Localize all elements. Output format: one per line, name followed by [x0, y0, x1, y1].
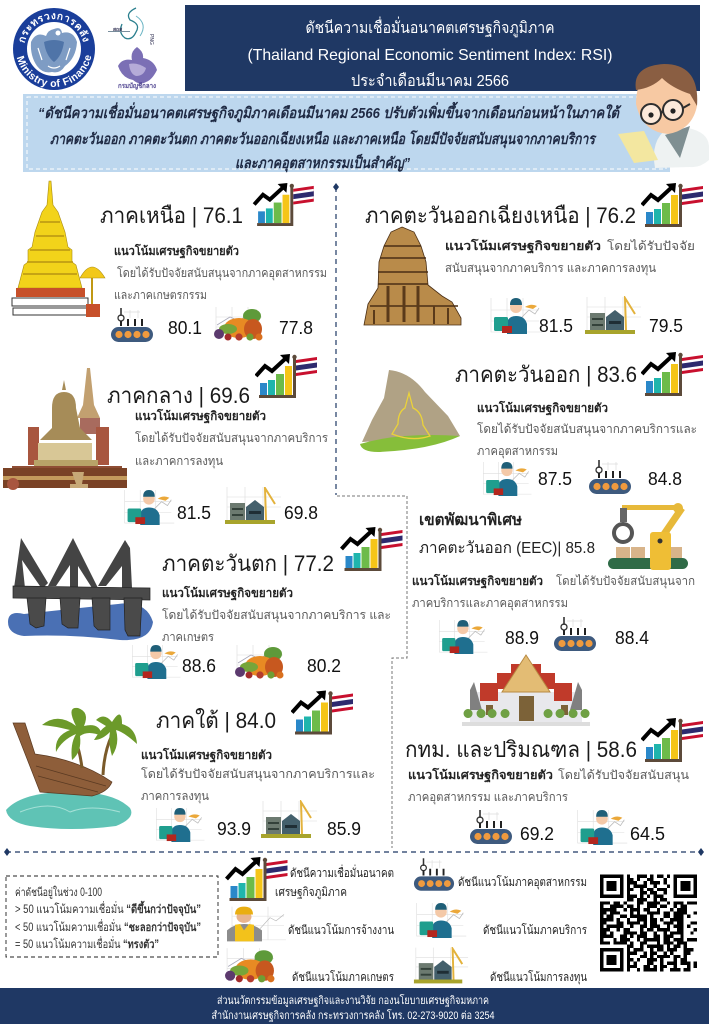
icon: investment: [261, 801, 317, 838]
number: agriculture 80.2: 80.2: [307, 656, 341, 676]
panel: Northeast: [364, 183, 703, 336]
heading: North: ภาคเหนือ | 76.1: [100, 203, 243, 228]
icon: sentiment chart: [342, 527, 402, 571]
icon: long-tail boat and palm trees: [6, 708, 137, 829]
text block: Bangkok: [408, 767, 689, 805]
icon: river bridge: [8, 538, 153, 640]
icon: marble temple: [462, 655, 590, 726]
icon: golden chedi: [12, 181, 105, 317]
icon: services: [491, 298, 542, 334]
icon: investment: [225, 487, 281, 524]
header banner: [185, 5, 700, 91]
legend text: services: ดัชนีแนวโน้มภาคบริการ: [483, 923, 587, 937]
text block: East: โดยได้รับปัจจัยสนับสนุนจากภาคบริการและ: [477, 422, 697, 437]
text block: EEC: ภาคบริการและภาคอุตสาหกรรม: [412, 596, 568, 611]
legend icon: agriculture: [225, 948, 274, 982]
header banner: ประจำเดือนมีนาคม 2566: [351, 72, 509, 90]
panel: EEC: [412, 503, 695, 654]
number: services 88.9: 88.9: [505, 628, 539, 648]
heading: Northeast: ภาคตะวันออกเฉียงเหนือ | 76.2: [365, 203, 636, 228]
heading: EEC: ภาคตะวันออก (EEC)| 85.8: [419, 540, 595, 557]
text block: Bangkok: โดยได้รับปัจจัยสนับสนุน: [558, 768, 689, 783]
logo: office emblem: PNG: [148, 34, 154, 45]
heading: South: ภาคใต้ | 84.0: [156, 708, 276, 733]
legend text: investment: ดัชนีแนวโน้มการลงทุน: [490, 970, 587, 985]
heading: Bangkok: กทม. และปริมณฑล | 58.6: [405, 737, 637, 762]
text block: Northeast: โดยได้รับปัจจัย: [607, 239, 695, 253]
footer band: [0, 988, 709, 1024]
number: industry 69.2: 69.2: [520, 824, 554, 844]
header banner: ดัชนีความเชื่อมั่นอนาคตเศรษฐกิจภูมิภาค: [306, 16, 554, 38]
icon: rock with golden Buddha: [360, 370, 460, 452]
icon: industry: [111, 308, 153, 342]
icon: agriculture: [214, 307, 262, 341]
panel: West: [8, 527, 402, 679]
number: industry 84.8: 84.8: [648, 469, 682, 489]
icon: industry: [554, 617, 596, 651]
text block: North: [114, 243, 327, 302]
text block: South: แนวโน้มเศรษฐกิจขยายตัว: [141, 747, 272, 763]
panel: North: [12, 181, 327, 342]
divider lines: [4, 183, 704, 856]
number: services 81.5: 81.5: [539, 316, 573, 336]
icon: agriculture: [235, 645, 284, 679]
number: services 88.6: 88.6: [182, 656, 216, 676]
illustration: doctor with glasses: [618, 64, 709, 168]
icon: sentiment chart: [642, 718, 703, 762]
legend icon: investment: [414, 948, 468, 983]
icon: sentiment chart: [292, 690, 353, 734]
footer band: ส่วนนวัตกรรมข้อมูลเศรษฐกิจและงานวิจัย กองนโยบายเศรษฐกิจมหภาค: [217, 993, 489, 1007]
panel: Central: [3, 354, 329, 525]
panel: Bangkok and vicinity: [405, 655, 703, 845]
icon: services: [125, 490, 174, 525]
text block: West: แนวโน้มเศรษฐกิจขยายตัว: [162, 585, 293, 601]
icon: services: [578, 810, 627, 845]
legend box: index range: < 50 แนวโน้มความเชื่อมั่น “ชะลอกว่าปัจจุบัน”: [15, 919, 201, 935]
number: services 81.5: 81.5: [177, 503, 211, 523]
text block: EEC: [412, 573, 695, 611]
icon: seated Buddha: [3, 368, 127, 490]
text block: East: แนวโน้มเศรษฐกิจขยายตัว: [477, 400, 608, 416]
text block: EEC: โดยได้รับปัจจัยสนับสนุนจาก: [556, 574, 695, 589]
text block: Bangkok: แนวโน้มเศรษฐกิจขยายตัว: [408, 767, 553, 783]
text block: North: แนวโน้มเศรษฐกิจขยายตัว: [114, 243, 239, 259]
legend box: index range: > 50 แนวโน้มความเชื่อมั่น “ดีขึ้นกว่าปัจจุบัน”: [15, 900, 201, 917]
legend: icon key: [225, 857, 587, 985]
number: investment 79.5: 79.5: [649, 316, 683, 336]
text block: North: โดยได้รับปัจจัยสนับสนุนจากภาคอุตสาหกรรม: [117, 266, 327, 281]
icon: sentiment chart: [254, 183, 314, 226]
logo: office emblem: [108, 8, 154, 45]
number: investment 85.9: 85.9: [327, 819, 361, 839]
legend box: index range: [6, 876, 218, 957]
text block: Central: [135, 408, 329, 469]
text block: Central: โดยได้รับปัจจัยสนับสนุนจากภาคบริการ: [135, 431, 329, 446]
number: agriculture 77.8: 77.8: [279, 318, 313, 338]
icon: sentiment chart: [642, 183, 703, 227]
number: industry 88.4: 88.4: [615, 628, 649, 648]
text block: West: โดยได้รับปัจจัยสนับสนุนจากภาคบริการ และ: [162, 608, 391, 623]
heading: Central: ภาคกลาง | 69.6: [107, 383, 250, 408]
icon: sentiment chart: [256, 354, 317, 398]
number: investment 69.8: 69.8: [284, 503, 318, 523]
text block: Bangkok: ภาคอุตสาหกรรม และภาคบริการ: [408, 790, 569, 805]
legend text: agriculture: ดัชนีแนวโน้มภาคเกษตร: [292, 970, 394, 984]
legend icon: employment: [227, 907, 286, 941]
logo: Ministry of Finance: กระทรวงการคลัง: [20, 13, 89, 43]
icon: industry: [470, 810, 512, 844]
icon: robot arm: [608, 503, 688, 570]
callout: summary quote: “ดัชนีความเชื่อมั่นอนาคตเศรษฐกิจภูมิภาคเดือนมีนาคม 2566 ปรับตัวเพิ่มขึ้นจากเดือนก่อนหน้าในภาคใต้: [38, 101, 622, 123]
number: services 64.5: 64.5: [630, 824, 665, 844]
legend text: employment: ดัชนีแนวโน้มการจ้างงาน: [288, 923, 394, 937]
number: industry 80.1: 80.1: [168, 318, 202, 338]
text block: West: [162, 585, 391, 644]
text block: Central: แนวโน้มเศรษฐกิจขยายตัว: [135, 408, 266, 424]
legend icon: services: [417, 903, 466, 938]
panel: South: [6, 690, 375, 842]
icon: services: [483, 462, 531, 496]
legend text: industry: ดัชนีแนวโน้มภาคอุตสาหกรรม: [458, 875, 587, 890]
logo: Ministry of Finance: Ministry of Finance: [16, 55, 91, 88]
callout: summary quote: [23, 94, 670, 173]
text block: West: ภาคเกษตร: [162, 630, 215, 644]
logo: office emblem: สถส: [113, 27, 123, 33]
logo: garuda emblem: กรมบัญชีกลาง: [118, 82, 156, 90]
callout: summary quote: ภาคตะวันออก ภาคตะวันตก ภาคตะวันออกเฉียงเหนือ และภาคเหนือ โดยมีปัจจัยสนับสนุนจากภาคบริการ: [50, 129, 597, 149]
text block: Northeast: แนวโน้มเศรษฐกิจขยายตัว: [445, 238, 601, 254]
legend text: sentiment index: ดัชนีความเชื่อมั่นอนาคต: [290, 864, 394, 880]
text block: EEC: แนวโน้มเศรษฐกิจขยายตัว: [412, 573, 543, 589]
icon: services: [439, 620, 487, 654]
footer band: สำนักงานเศรษฐกิจการคลัง กระทรวงการคลัง โทร. 02-273-9020 ต่อ 3254: [212, 1008, 494, 1022]
heading: EEC: [419, 511, 595, 557]
number: services 93.9: 93.9: [217, 819, 251, 839]
header banner: (Thailand Regional Economic Sentiment Index: RSI): [248, 47, 612, 64]
logo: Ministry of Finance: [13, 8, 95, 90]
text block: Central: และภาคการลงทุน: [135, 454, 223, 469]
icon: investment: [585, 297, 641, 334]
callout: summary quote: และภาคอุตสาหกรรมเป็นสำคัญ”: [235, 153, 410, 173]
icon: services: [156, 808, 204, 842]
text block: South: โดยได้รับปัจจัยสนับสนุนจากภาคบริการและ: [141, 767, 375, 782]
text block: North: และภาคเกษตรกรรม: [114, 288, 207, 302]
icon: stone prasat: [364, 227, 461, 325]
legend box: index range: ค่าดัชนีอยู่ในช่วง 0-100: [15, 886, 102, 899]
text block: South: ภาคการลงทุน: [141, 789, 209, 804]
heading: West: ภาคตะวันตก | 77.2: [162, 551, 334, 576]
icon: industry: [589, 460, 631, 494]
text block: East: [477, 400, 697, 459]
text block: South: [141, 747, 375, 804]
legend icon: industry: [414, 858, 454, 891]
heading: EEC: เขตพัฒนาพิเศษ: [419, 511, 522, 529]
icon: services: [132, 645, 180, 679]
heading: East: ภาคตะวันออก | 83.6: [455, 362, 637, 387]
text block: Northeast: สนับสนุนจากภาคบริการ และภาคการลงทุน: [445, 261, 656, 276]
number: services 87.5: 87.5: [538, 469, 572, 489]
text block: Northeast: [445, 238, 695, 276]
legend text: sentiment index: เศรษฐกิจภูมิภาค: [275, 885, 347, 900]
panel: East: [360, 352, 703, 496]
legend text: sentiment index: [275, 864, 394, 900]
QR code: [600, 874, 697, 972]
legend box: index range: = 50 แนวโน้มความเชื่อมั่น “ทรงตัว”: [15, 936, 159, 951]
icon: sentiment chart: [642, 352, 703, 396]
text block: East: ภาคอุตสาหกรรม: [477, 444, 558, 459]
logo: garuda emblem: [118, 47, 157, 90]
legend icon: sentiment chart: [226, 857, 288, 901]
